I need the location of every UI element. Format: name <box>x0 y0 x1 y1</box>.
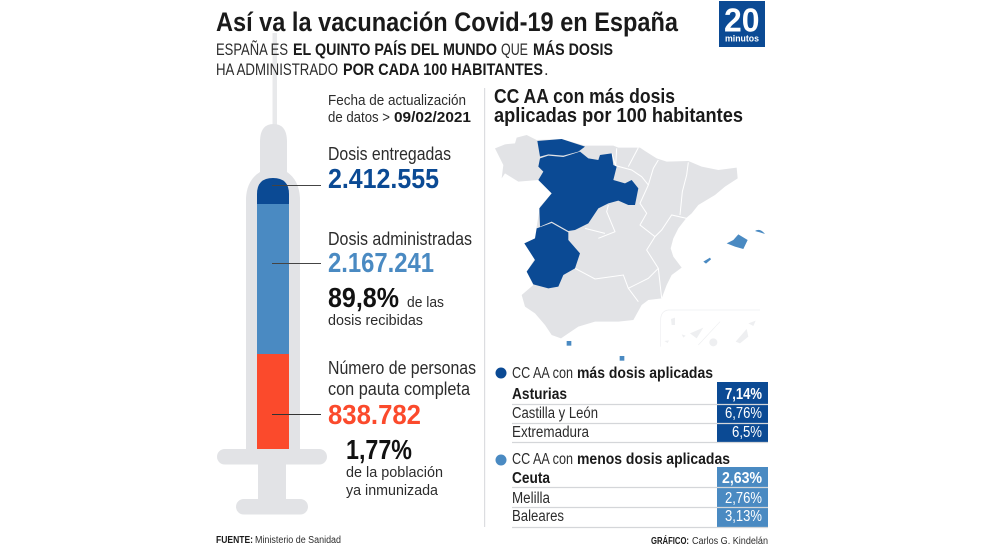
subtitle: QUE <box>501 41 528 59</box>
update date: Fecha de actualización <box>328 93 466 109</box>
graphic credit: Carlos G. Kindelán <box>692 536 768 547</box>
stat: 89,8% of doses received: dosis recibidas <box>328 313 423 329</box>
subtitle: . <box>544 61 549 79</box>
update date <box>328 93 471 126</box>
legend heading: fewest doses: menos dosis aplicadas <box>577 451 730 468</box>
map: region borders <box>575 148 688 302</box>
map: Baleares <box>703 230 765 264</box>
stat: administered doses: 2.167.241 <box>328 247 434 278</box>
subtitle <box>216 39 613 79</box>
table: fewest doses: Melilla <box>512 490 550 507</box>
title: Así va la vacunación Covid-19 en España <box>216 7 679 37</box>
syringe illustration <box>217 33 327 514</box>
leader line: administered <box>272 262 321 264</box>
source credit: Ministerio de Sanidad <box>255 535 341 546</box>
subtitle: MÁS DOSIS <box>533 40 613 59</box>
map: Canary Islands inset <box>661 310 760 347</box>
stat: 89,8% of doses received: de las <box>407 295 444 311</box>
stat: people fully vaccinated: 838.782 <box>328 399 421 430</box>
subtitle: HA ADMINISTRADO <box>216 61 338 79</box>
map: Asturias <box>537 139 585 157</box>
map: Melilla <box>620 356 624 361</box>
logo: 20 minutos <box>719 1 765 47</box>
legend heading: fewest doses: CC AA con <box>512 451 573 468</box>
subtitle: EL QUINTO PAÍS DEL MUNDO <box>293 40 497 59</box>
legend heading: most doses: más dosis aplicadas <box>577 365 713 382</box>
stat: people fully vaccinated: Número de personas <box>328 357 476 378</box>
table: most doses <box>512 382 768 442</box>
table: fewest doses: 2,63% <box>722 470 762 487</box>
stat: administered doses: Dosis administradas <box>328 228 472 249</box>
logo: 20 minutos: 20 <box>724 2 760 38</box>
stat: 1,77% of population <box>346 434 443 499</box>
map: Ceuta <box>567 341 571 346</box>
bullet: most doses <box>496 368 506 378</box>
legend heading: fewest doses <box>512 451 730 468</box>
legend heading: most doses <box>512 365 713 382</box>
table: most doses: Extremadura <box>512 424 589 441</box>
stat: 89,8% of doses received: 89,8% <box>328 282 399 313</box>
map: Extremadura <box>524 223 580 288</box>
stat: delivered doses: 2.412.555 <box>328 163 439 194</box>
table: fewest doses: 2,76% <box>725 490 762 507</box>
stat: 1,77% of population: 1,77% <box>346 434 412 465</box>
table: most doses: 7,14% <box>725 386 762 403</box>
legend heading: most doses: CC AA con <box>512 365 573 382</box>
table: most doses: Castilla y León <box>512 405 598 422</box>
update date: 09/02/2021 <box>394 110 471 126</box>
table: most doses: Asturias <box>512 386 567 403</box>
syringe liquid: fully vaccinated <box>257 354 289 449</box>
stat: people fully vaccinated <box>328 357 476 430</box>
map of Spain <box>495 135 765 361</box>
subtitle: ESPAÑA ES <box>216 39 288 59</box>
syringe liquid: delivered doses <box>257 178 289 204</box>
stat: 89,8% of doses received <box>328 282 444 329</box>
table: fewest doses <box>512 467 768 528</box>
table: fewest doses: Ceuta <box>512 470 550 487</box>
map: Castilla y León <box>538 152 638 231</box>
stat: 1,77% of population: de la población <box>346 464 443 481</box>
map heading <box>494 86 743 127</box>
map heading: CC AA con más dosis <box>494 86 675 108</box>
graphic credit <box>651 534 768 547</box>
stat: delivered doses: Dosis entregadas <box>328 143 451 164</box>
table: fewest doses: 3,13% <box>725 508 762 525</box>
source credit: FUENTE: <box>216 535 253 546</box>
syringe liquid: administered doses <box>257 204 289 354</box>
graphic credit: GRÁFICO: <box>651 534 689 547</box>
bullet: fewest doses <box>496 454 506 466</box>
leader line: complete schedule <box>272 414 321 416</box>
map: mainland regions <box>495 135 738 338</box>
stat: people fully vaccinated: con pauta completa <box>328 378 471 399</box>
logo: 20 minutos: minutos <box>725 34 759 44</box>
table: fewest doses: Baleares <box>512 508 564 525</box>
table: most doses: 6,5% <box>732 424 762 441</box>
stat: 1,77% of population: ya inmunizada <box>346 482 439 499</box>
subtitle: POR CADA 100 HABITANTES <box>343 61 543 79</box>
table: most doses: 6,76% <box>725 405 762 422</box>
stat: delivered doses <box>328 143 451 194</box>
source credit <box>216 535 341 546</box>
map heading: aplicadas por 100 habitantes <box>494 105 743 127</box>
stat: administered doses <box>328 228 472 278</box>
update date: de datos > <box>328 110 390 126</box>
leader line: delivered <box>272 184 321 186</box>
